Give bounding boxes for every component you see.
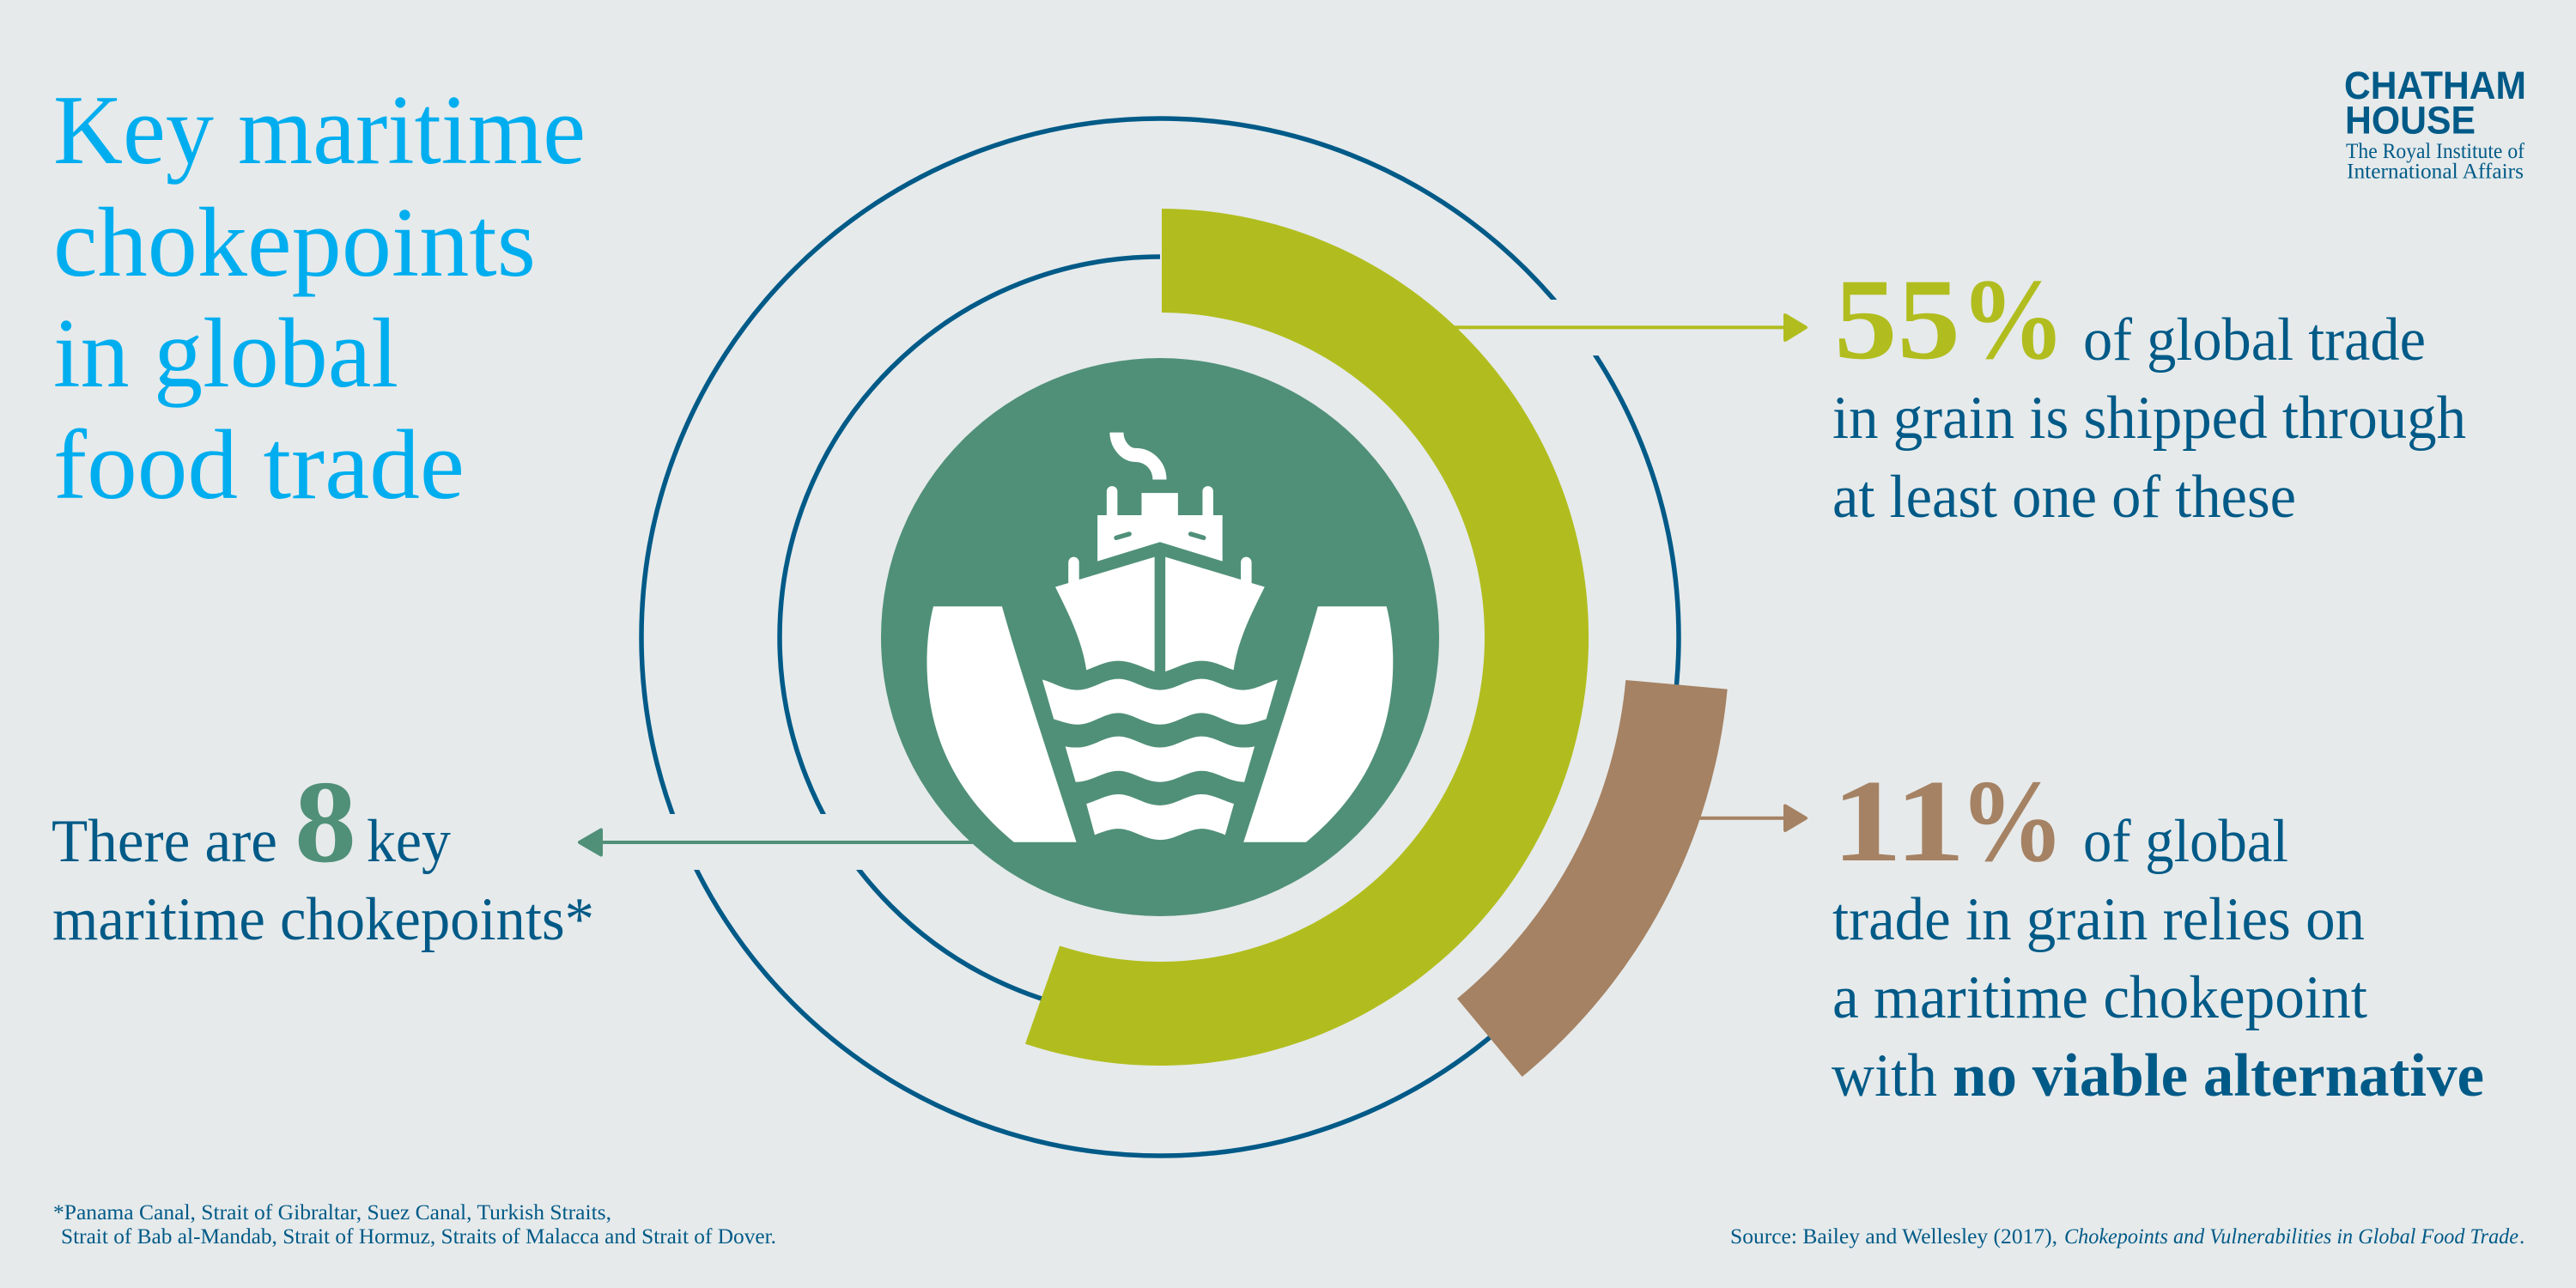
arc: 11% of grain trade [1457, 680, 1728, 1077]
inner ring [777, 254, 1160, 1001]
logo: Chatham House: International Affairs [2347, 160, 2524, 184]
callout: 55% statistic: of global trade [2083, 307, 2426, 374]
callout: 11% statistic [1832, 756, 2484, 1109]
callout: 11% statistic: % [1959, 756, 2064, 886]
callout: 8 chokepoints: 8 [295, 756, 356, 887]
logo: Chatham House: CHATHAM [2344, 64, 2526, 107]
source: . [2519, 1225, 2524, 1249]
callout: 55% statistic [1832, 256, 2466, 531]
arrow: 55% callout [1443, 315, 1806, 340]
callout: 55% statistic: in grain is shipped through [1832, 385, 2466, 452]
callout: 11% statistic: 11 [1832, 756, 1965, 886]
source: Source: Bailey and Wellesley (2017), [1730, 1225, 2057, 1249]
arc: 55% of grain trade [1025, 209, 1589, 1066]
title: chokepoints [53, 188, 536, 297]
arrow: 8 chokepoints callout [580, 829, 987, 855]
callout: 11% statistic: no viable alternative [1953, 1042, 2484, 1109]
footnote [53, 1201, 776, 1249]
footnote: Strait of Bab al-Mandab, Strait of Hormuz, Straits of Malacca and Strait of Dover. [61, 1225, 776, 1249]
callout: 11% statistic: with [1832, 1042, 1937, 1109]
callout: 8 chokepoints [52, 756, 594, 953]
title: Key maritime [53, 76, 586, 185]
logo: Chatham House: HOUSE [2345, 98, 2476, 143]
outer ring [641, 118, 1679, 1156]
logo: Chatham House: The Royal Institute of [2346, 140, 2525, 163]
callout: 8 chokepoints: key [367, 808, 451, 875]
callout: 55% statistic: 55 [1834, 256, 1960, 384]
footnote: *Panama Canal, Strait of Gibraltar, Suez Canal, Turkish Straits, [53, 1201, 611, 1224]
callout: 8 chokepoints: There are [52, 808, 277, 875]
callout: 11% statistic: a maritime chokepoint [1832, 964, 2367, 1031]
title: in global [53, 299, 398, 408]
source: Chokepoints and Vulnerabilities in Global Food Trade [2064, 1225, 2518, 1249]
logo: Chatham House [2344, 64, 2526, 184]
title [53, 76, 586, 519]
source [1730, 1225, 2524, 1249]
callout: 8 chokepoints: maritime chokepoints* [52, 886, 594, 953]
ship and water drawing [927, 433, 1393, 842]
icon background circle [881, 358, 1439, 916]
callout: 55% statistic: at least one of these [1832, 464, 2296, 531]
arrow: 11% callout [1683, 805, 1806, 830]
central icon: ship in a narrow strait [881, 358, 1439, 916]
callout: 11% statistic: trade in grain relies on [1832, 886, 2365, 953]
callout: 11% statistic: of global [2083, 808, 2288, 875]
title: food trade [53, 410, 465, 519]
callout: 55% statistic: % [1960, 256, 2065, 384]
